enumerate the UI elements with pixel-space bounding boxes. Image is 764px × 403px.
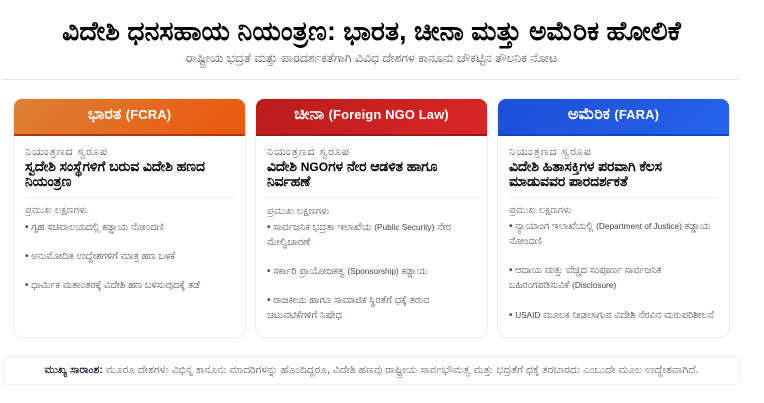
heading: USA control nature: ವಿದೇಶಿ ಹಿತಾಸಕ್ತಿಗಳ ಪರವಾಗಿ ಕೆಲಸ (509, 159, 662, 174)
list item: ಚಟುವಟಿಕೆಗಳಿಗೆ ನಿಷೇಧ (267, 310, 342, 321)
heading: USA control nature (509, 159, 662, 189)
label: key features: ಪ್ರಮುಖ ಲಕ್ಷಣಗಳು (267, 206, 330, 217)
list item: • USAID ಮೂಲಕ ನೀಡಲಾಗುವ ವಿದೇಶಿ ನೆರವಿನ ಮರುಪರಿಶೀಲನೆ (509, 310, 714, 321)
panel header: India: ಭಾರತ (FCRA) (88, 106, 171, 123)
label: nature of control: ನಿಯಂತ್ರಣದ ಸ್ವರೂಪ (267, 146, 350, 158)
heading: China control nature: ನಿರ್ವಹಣೆ (267, 174, 310, 189)
panel: India FCRA (14, 99, 245, 337)
panel header: China: ಚೀನಾ (Foreign NGO Law) (294, 106, 449, 123)
panel header: India (14, 99, 245, 136)
heading: USA control nature: ಮಾಡುವವರ ಪಾರದರ್ಶಕತೆ (509, 174, 628, 189)
list item (267, 222, 451, 248)
list item (509, 221, 710, 247)
list item (509, 265, 661, 291)
heading: India control nature (25, 159, 205, 190)
label: nature of control: ನಿಯಂತ್ರಣದ ಸ್ವರೂಪ (509, 146, 592, 158)
list item: ನೋಂದಣಿ (509, 236, 542, 247)
list item: • ಧಾರ್ಮಿಕ ಮತಾಂತರಕ್ಕೆ ವಿದೇಶಿ ಹಣ ಬಳಸುವುದಕ್ಕೆ ತಡೆ (25, 280, 200, 291)
list item: • ನ್ಯಾಯಾಂಗ ಇಲಾಖೆಯಲ್ಲಿ (Department of Justice) ಕಡ್ಡಾಯ (509, 221, 710, 232)
list item: • ಅನುಮೋದಿತ ಉದ್ದೇಶಗಳಿಗೆ ಮಾತ್ರ ಹಣ ಬಳಕೆ (25, 251, 175, 262)
callout: key summary (3, 356, 740, 385)
panel header: China (256, 99, 487, 136)
heading: China control nature: ವಿದೇಶಿ NGOಗಳ ನೇರ ಆಡಳಿತ ಹಾಗೂ (267, 159, 437, 174)
callout: key summary: ಮುಖ್ಯ ಸಾರಾಂಶ: ಮೂರೂ ದೇಶಗಳು ವಿಭಿನ್ನ ಕಾನೂನು ಮಾದರಿಗಳನ್ನು ಹೊಂದಿದ್ದರೂ, ವಿದೇಶಿ ಹಣವು ರಾಷ್ಟ್ರೀಯ ಸಾರ್ವಭೌಮತ್ವ ಮತ್ತು ಭದ್ರತೆಗೆ ಧಕ್ಕೆ ತರಬಾರದು ಎಂಬುದೇ ಮೂಲ ಉದ್ದೇಶವಾಗಿದೆ. (45, 364, 698, 376)
list item: • ರಾಜಕೀಯ ಹಾಗೂ ಸಾಮಾಜಿಕ ಸ್ಥಿರತೆಗೆ ಧಕ್ಕೆ ತರುವ (267, 295, 429, 306)
label: key features: ಪ್ರಮುಖ ಲಕ್ಷಣಗಳು (509, 205, 572, 216)
panel: USA FARA (498, 99, 729, 337)
list item (267, 295, 429, 321)
panel header: USA: ಅಮೆರಿಕ (FARA) (568, 106, 659, 123)
heading: India control nature: ಸ್ವದೇಶಿ ಸಂಸ್ಥೆಗಳಿಗೆ ಬರುವ ವಿದೇಶಿ ಹಣದ (25, 159, 205, 174)
panel header: USA (498, 99, 729, 136)
list item: • ಗೃಹ ಸಚಿವಾಲಯದಲ್ಲಿ ಕಡ್ಡಾಯ ನೋಂದಣಿ (25, 222, 164, 233)
list item: • ಸಾರ್ವಜನಿಕ ಭದ್ರತಾ ಇಲಾಖೆಯ (Public Security) ನೇರ (267, 222, 451, 233)
title: ವಿದೇಶಿ ಧನಸಹಾಯ ನಿಯಂತ್ರಣ: ಭಾರತ, ಚೀನಾ ಮತ್ತು ಅಮೆರಿಕ ಹೋಲಿಕೆ (62, 16, 681, 46)
subtitle: ರಾಷ್ಟ್ರೀಯ ಭದ್ರತೆ ಮತ್ತು ಪಾರದರ್ಶಕತೆಗಾಗಿ ವಿವಿಧ ದೇಶಗಳ ಕಾನೂನು ಚೌಕಟ್ಟಿನ ತೌಲನಿಕ ನೋಟ (186, 51, 557, 65)
list item: • ಸರ್ಕಾರಿ ಪ್ರಾಯೋಜಕತ್ವ (Sponsorship) ಕಡ್ಡಾಯ (267, 266, 427, 277)
panel: China Foreign NGO Law (256, 99, 487, 337)
label: nature of control: ನಿಯಂತ್ರಣದ ಸ್ವರೂಪ (25, 146, 108, 158)
list item: ಬಹಿರಂಗಪಡಿಸುವಿಕೆ (Disclosure) (509, 280, 616, 291)
heading: China control nature (267, 159, 438, 189)
label: key features: ಪ್ರಮುಖ ಲಕ್ಷಣಗಳು (25, 205, 88, 216)
list item: • ಆದಾಯ ಮತ್ತು ವೆಚ್ಚದ ಸಂಪೂರ್ಣ ಸಾರ್ವಜನಿಕ (509, 265, 661, 276)
heading: India control nature: ನಿಯಂತ್ರಣ (25, 174, 71, 189)
list item: ಮೇಲ್ವಿಚಾರಣೆ (267, 237, 310, 248)
